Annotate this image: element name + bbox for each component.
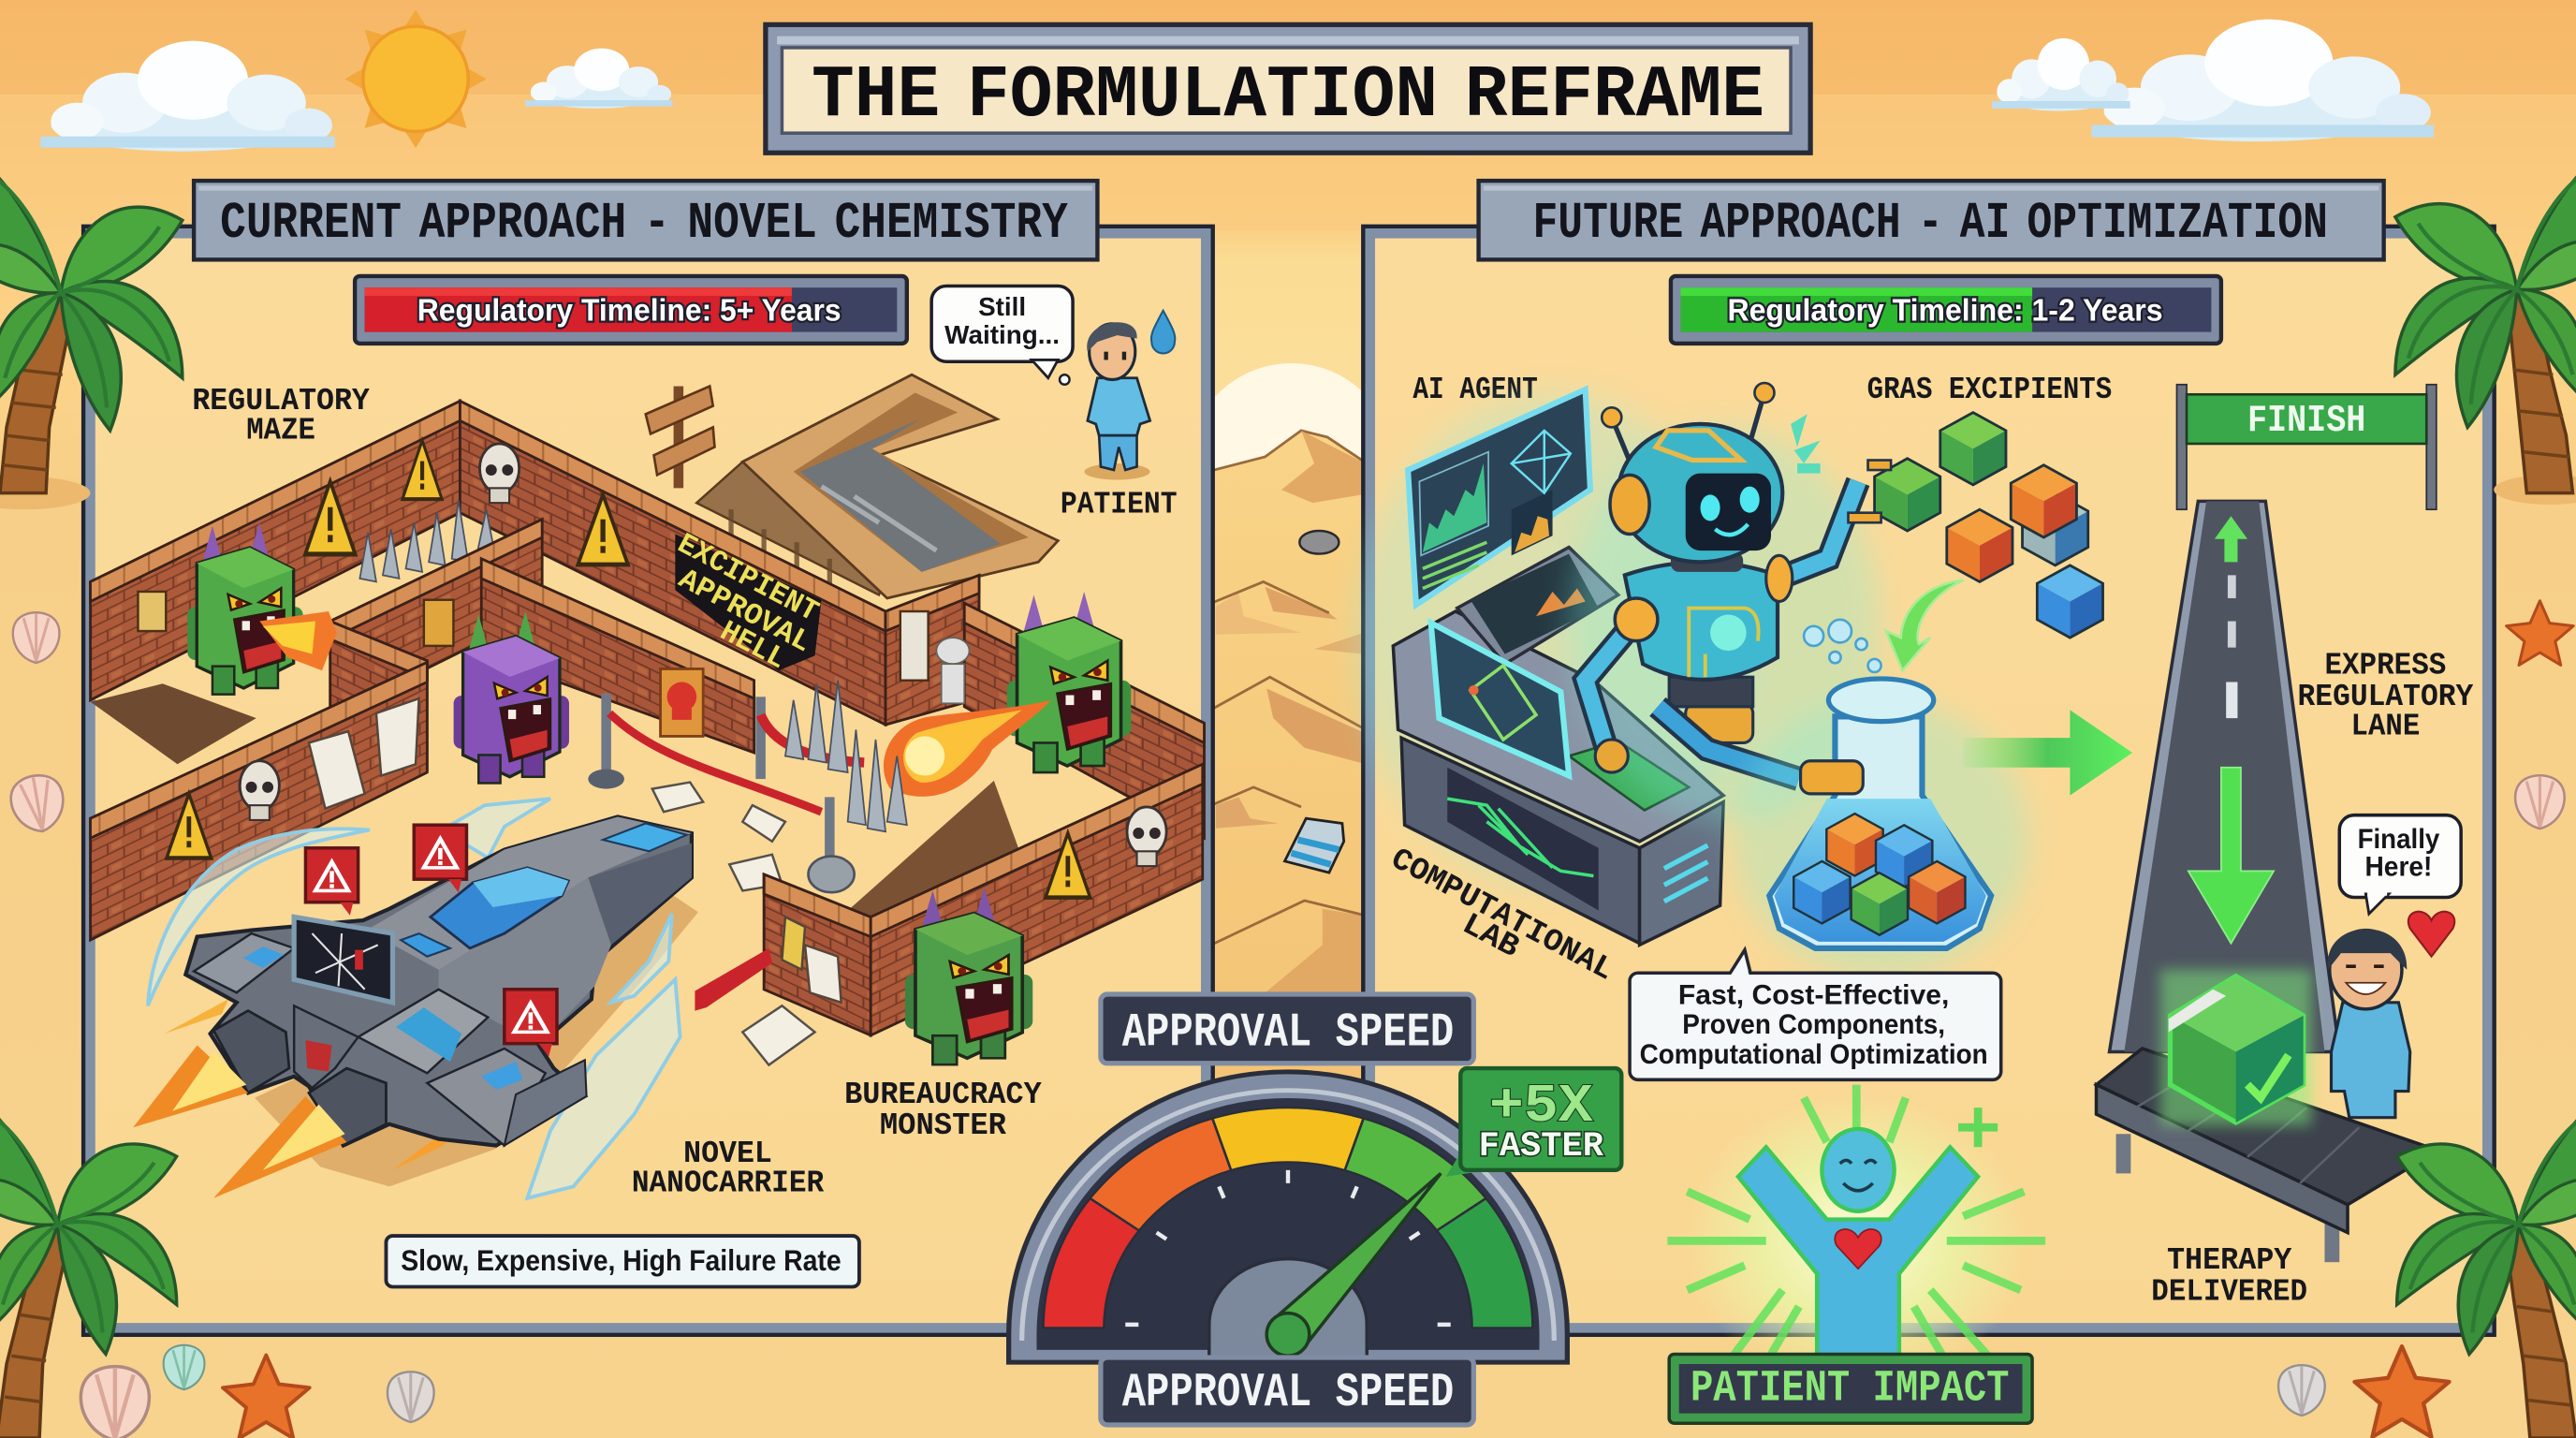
chest circuit [1689, 609, 1759, 677]
mid section [439, 877, 611, 1045]
cloud right large [2092, 20, 2434, 141]
speech bubble: finally here: Finally [2358, 824, 2440, 855]
cubes in flask [1826, 814, 1883, 876]
posters on lower left wall [309, 698, 419, 809]
cube: green [1940, 413, 2006, 485]
neck [1671, 552, 1743, 572]
desk screen network [1447, 799, 1593, 876]
beach shells and starfish [7, 601, 2573, 1438]
label: ai agent: AI AGENT [1412, 373, 1538, 408]
progress bar: regulatory timeline 1-2 years: Regulatory Timeline: 1-2 Years [1727, 293, 2163, 328]
scattered paperwork [652, 783, 815, 1065]
hull side [588, 844, 692, 945]
label: therapy delivered: THERAPY [2167, 1243, 2291, 1279]
centre pod [359, 990, 488, 1073]
cube: orange upper [2011, 465, 2076, 537]
finish gate: FINISH [2247, 400, 2365, 443]
monster: green right [1007, 592, 1131, 772]
sign: warning triangle [402, 440, 442, 499]
label: computational lab: LAB [1456, 907, 1525, 966]
heading: approval speed bottom: APPROVAL SPEED [1122, 1367, 1454, 1420]
label: express regulatory lane [2298, 649, 2473, 745]
label: express regulatory lane: REGULATORY [2298, 680, 2473, 715]
glow [1734, 698, 2029, 977]
hull [185, 816, 692, 1146]
icon: red heart [2408, 912, 2454, 957]
wall: lower right brick wall [764, 764, 1203, 1035]
small flames [165, 999, 459, 1170]
sign: warning triangle [305, 481, 355, 554]
gauge needle [1273, 1173, 1441, 1351]
alert: warning 3 [505, 990, 557, 1057]
shadow [255, 889, 698, 1186]
alert: warning 2 [414, 825, 466, 892]
label: regulatory maze [192, 384, 370, 449]
brick maze walls [91, 401, 1204, 838]
title: THE FORMULATION REFRAME [812, 53, 1764, 138]
finish gate [2177, 385, 2437, 509]
callout: slow expensive high failure rate [386, 1236, 859, 1287]
panel: current approach frame [84, 227, 1212, 1334]
label: novel nanocarrier: NANOCARRIER [632, 1167, 824, 1202]
star right [2507, 601, 2573, 665]
desk screen [1447, 768, 1599, 911]
head [1618, 424, 1782, 562]
shell left lower [7, 771, 68, 836]
shell bottom [80, 1367, 149, 1438]
gras cube held in hand [1875, 459, 1940, 531]
rock in dunes [1299, 531, 1339, 554]
plus [1958, 1108, 1998, 1147]
speech bubble: still waiting [931, 286, 1073, 385]
label: therapy delivered: DELIVERED [2151, 1275, 2307, 1311]
palm tree bottom left [0, 1104, 177, 1438]
torso [1625, 562, 1778, 680]
conveyor belt [2097, 1049, 2438, 1262]
icon: red skull sign [661, 668, 703, 736]
dirt trench lower right [846, 781, 1027, 937]
antennas [1612, 393, 1764, 493]
heading: current approach: CURRENT APPROACH - NOVEL CHEMISTRY [220, 196, 1068, 253]
heading: current approach [194, 181, 1097, 259]
eye right [1740, 487, 1760, 513]
rope barrier and stanchions [588, 694, 864, 892]
monster: green fire-breather [187, 522, 303, 695]
inner brick walls [330, 520, 754, 770]
left antenna tip [1602, 407, 1621, 427]
vent block [294, 1005, 359, 1088]
left arm outline [1586, 620, 1636, 749]
speech bubble: still waiting: Waiting... [944, 320, 1060, 349]
spine [366, 816, 692, 970]
left shoulder [1615, 598, 1658, 641]
shields [148, 799, 681, 1198]
desk vents [1663, 844, 1709, 903]
icon: skull on wall [479, 444, 520, 503]
label: bureaucracy monster: BUREAUCRACY [844, 1078, 1042, 1113]
callout: fast cost effective: Fast, Cost-Effective, [1678, 980, 1949, 1011]
label: bureaucracy monster: MONSTER [880, 1108, 1006, 1144]
right shoulder [1766, 555, 1793, 601]
shell bottom right [2278, 1365, 2325, 1416]
label: novel nanocarrier [632, 1137, 824, 1202]
sparks [1791, 414, 1821, 474]
cube red [1909, 861, 1965, 923]
star bottom left [223, 1356, 310, 1438]
cloud left small [525, 49, 673, 109]
label: patient impact [1669, 1354, 2032, 1423]
shell grey [388, 1372, 434, 1422]
robot fingers [1848, 461, 1891, 522]
computational lab workstation [1355, 389, 1749, 945]
small window [401, 933, 450, 957]
badge: +5X faster: +5X [1489, 1077, 1593, 1137]
label: novel nanocarrier: NOVEL [683, 1137, 772, 1172]
engines [213, 1011, 386, 1146]
arrow: up on road [2215, 516, 2247, 562]
hand on keyboard [1595, 740, 1628, 772]
sun [345, 10, 487, 148]
background centre strip: sunset and dunes [1188, 230, 1395, 1118]
gauge housing [1009, 1072, 1567, 1362]
glow [1355, 394, 1749, 888]
rays [1667, 1085, 2045, 1377]
cloth on dunes [1284, 818, 1344, 873]
cloud left large [40, 41, 335, 152]
shell teal [164, 1345, 204, 1389]
badge: +5X faster [1445, 1068, 1621, 1177]
heading: approval speed top: APPROVAL SPEED [1122, 1006, 1454, 1060]
lower wing [427, 1049, 587, 1146]
progress bar: regulatory timeline 5+ years [355, 276, 907, 344]
hand on flask [1801, 761, 1863, 794]
gauge hub plate [1209, 1259, 1367, 1364]
callout: fast cost effective: Computational Optimization [1640, 1039, 1988, 1070]
icon: skull and warning on lower left wall [167, 761, 279, 858]
icon: wooden direction signpost [646, 387, 714, 488]
right antenna tip [1754, 383, 1775, 403]
sign: excipient approval hell: APPROVAL [673, 564, 815, 660]
shell right [2515, 775, 2565, 829]
speech bubble: still waiting: Still [978, 292, 1026, 321]
sign: excipient approval hell: HELL [714, 616, 791, 677]
arrow: down on road [2188, 768, 2274, 944]
face [1686, 474, 1771, 550]
monster: bureaucracy [905, 888, 1032, 1064]
cube blue [1876, 825, 1932, 888]
forehead trim [1656, 431, 1741, 461]
bubbles [1804, 620, 1881, 672]
glow [1569, 427, 1881, 822]
novel nanocarrier spaceship [133, 799, 698, 1198]
panel: future approach frame [1364, 227, 2494, 1334]
heading: future approach: FUTURE APPROACH - AI OPTIMIZATION [1533, 196, 2328, 253]
flame: first monster [259, 611, 337, 670]
cockpit [431, 868, 568, 948]
desk side [1640, 802, 1723, 945]
rim [1828, 679, 1934, 722]
label: patient: PATIENT [1061, 488, 1178, 523]
glass [1769, 716, 1991, 948]
label: gras excipients: GRAS EXCIPIENTS [1867, 373, 2112, 408]
arrow: green toward express lane [1963, 710, 2132, 796]
flask with cubes [1734, 679, 2029, 977]
patient impact figure with rays [1667, 1085, 2045, 1388]
nose window [603, 823, 687, 851]
left wing [194, 933, 294, 992]
label: express regulatory lane: LANE [2351, 710, 2420, 745]
gauge ticks [1125, 1170, 1451, 1325]
liquid [1775, 799, 1986, 942]
shell left [13, 612, 59, 663]
front holographic panel [1431, 623, 1569, 776]
desk back [1393, 611, 1723, 842]
monster: purple [454, 611, 569, 783]
progress bar: regulatory timeline 1-2 years [1671, 276, 2221, 344]
face [1840, 1160, 1876, 1191]
hips [1686, 703, 1753, 742]
small sign and poster on inner wall [138, 592, 929, 681]
gauge colour bands [1043, 1108, 1533, 1328]
big holographic monitor [1408, 389, 1590, 605]
icon: skull and warning on lower right wall [1046, 807, 1166, 898]
red ribbon [695, 948, 772, 1011]
callout: fast cost effective: Proven Components, [1682, 1009, 1945, 1040]
chest core [1710, 615, 1747, 651]
desk front [1401, 738, 1640, 944]
palm tree bottom right [2397, 1104, 2576, 1438]
icon: skeleton behind wall [936, 638, 970, 703]
flames [133, 1045, 346, 1198]
cube: orange lower [1947, 509, 2012, 581]
star bottom right [2354, 1346, 2450, 1437]
sign: excipient approval hell [672, 528, 824, 677]
lower arm to flask fill [1658, 707, 1799, 779]
trench: dry moat of the maze [696, 374, 1058, 605]
cloud right small [1992, 38, 2130, 110]
ai robot [1569, 383, 1881, 822]
keyboard [1569, 741, 1689, 810]
callout: fast cost effective [1630, 950, 2001, 1079]
speech bubble: finally here: Here! [2364, 852, 2432, 883]
wall: lower left brick wall [91, 662, 427, 940]
icon: spike pit front [785, 681, 907, 831]
label: computational lab: COMPUTATIONAL [1384, 842, 1619, 989]
smile [1715, 524, 1748, 535]
eyes [1701, 494, 1720, 521]
title [766, 24, 1810, 153]
heading: future approach [1479, 181, 2384, 259]
approval speed gauge [1009, 1072, 1567, 1364]
notes on lower right wall [782, 917, 842, 1003]
sign: warning triangle [578, 494, 628, 565]
waist [1669, 677, 1753, 707]
left arm fill [1586, 620, 1636, 749]
cube green [1852, 873, 1908, 935]
palm tree top left [0, 165, 183, 509]
icon: sad patient [1084, 311, 1175, 480]
badge: +5X faster: FASTER [1479, 1127, 1604, 1167]
hub [1266, 1313, 1310, 1356]
body [1738, 1147, 1978, 1357]
cube blue low [1793, 861, 1851, 923]
alert: warning 1 [305, 848, 359, 916]
headphone [1610, 475, 1649, 535]
heading: approval speed bottom [1101, 1357, 1473, 1425]
secondary monitor [1457, 548, 1618, 664]
label: regulatory maze: MAZE [246, 414, 315, 449]
heart [1835, 1229, 1881, 1269]
dirt pit left [91, 683, 256, 764]
label: regulatory maze: REGULATORY [192, 384, 370, 419]
lower arm to flask outline [1658, 707, 1799, 779]
label: patient impact: PATIENT IMPACT [1690, 1365, 2009, 1415]
cube: blue [2037, 565, 2103, 638]
arrow: curved green into flask [1886, 580, 1963, 670]
head [1822, 1129, 1895, 1211]
cracked display [294, 917, 392, 1003]
icon: spike pit back [359, 500, 494, 581]
label: bureaucracy monster [844, 1078, 1042, 1144]
package: therapy box [2160, 970, 2311, 1125]
flame: big fireball [884, 700, 1051, 797]
happy patient [2328, 929, 2410, 1118]
express lane road [2110, 501, 2339, 1051]
speech bubble: finally here [2339, 815, 2461, 914]
palm tree top right [2395, 161, 2576, 505]
cube: blue-grey [2023, 493, 2088, 565]
heading: approval speed top [1101, 994, 1473, 1064]
callout: slow expensive high failure rate: Slow, Expensive, High Failure Rate [401, 1243, 842, 1277]
label: therapy delivered [2151, 1243, 2307, 1311]
progress bar: regulatory timeline 5+ years: Regulatory Timeline: 5+ Years [417, 293, 842, 328]
raised arm [1782, 481, 1858, 577]
raised arm fill [1782, 481, 1858, 577]
label: express regulatory lane: EXPRESS [2324, 649, 2446, 684]
glow [1684, 1093, 2029, 1388]
sign: excipient approval hell: EXCIPIENT [672, 528, 824, 630]
